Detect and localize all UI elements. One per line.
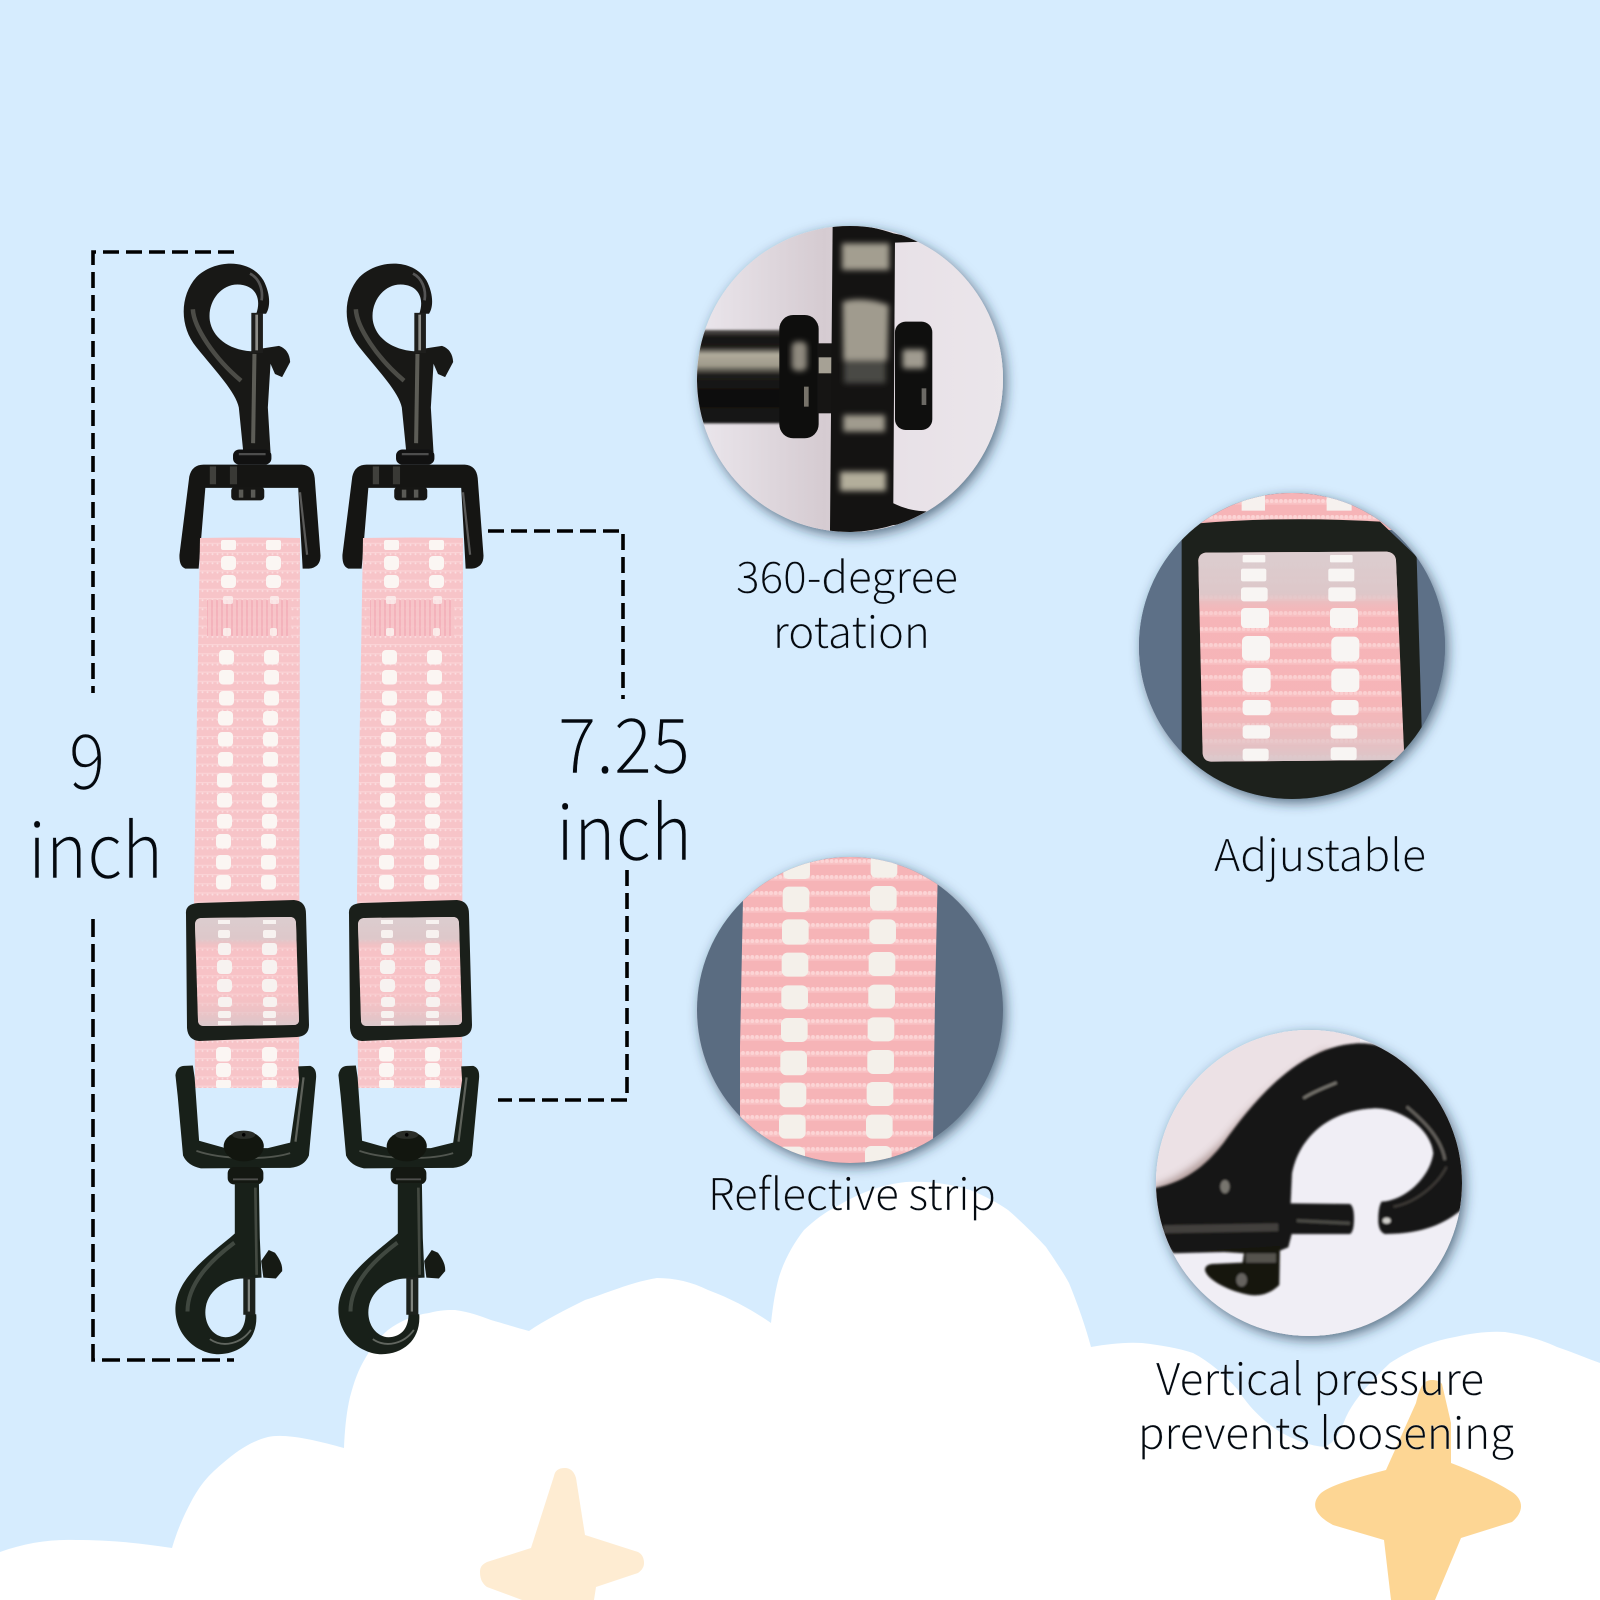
rivet nub — [895, 322, 932, 430]
caption: 360-degree rotation: 360-degree — [736, 542, 958, 606]
detail circle: adjustable buckle — [1130, 485, 1460, 815]
detail circle: swivel — [690, 220, 1010, 540]
hook highlights — [1303, 1083, 1337, 1098]
dimension line: 7.25 inch — [488, 531, 627, 1100]
hook body — [175, 1183, 262, 1354]
cloud — [0, 1182, 1600, 1600]
decorative star: small — [480, 1468, 644, 1600]
label: 7.25 inch: inch — [556, 772, 692, 882]
bar tack stitching — [207, 600, 291, 636]
label: 9 inch: inch — [28, 790, 163, 900]
vertical ring — [830, 225, 933, 532]
backdrop — [1153, 1027, 1360, 1190]
strap assembly: left — [175, 264, 321, 1354]
caption: Vertical pressure prevents loosening: Vertical pressure — [1156, 1344, 1484, 1408]
swivel shaft — [693, 330, 782, 423]
collar — [779, 315, 819, 438]
reflective dots — [778, 855, 897, 1170]
dimension line: 9 inch — [93, 252, 234, 1360]
caption: Adjustable: Adjustable — [1214, 820, 1426, 884]
strap assembly: right — [338, 264, 484, 1354]
bottom frame — [175, 1065, 316, 1168]
webbing close-up — [740, 850, 938, 1170]
hook body — [1153, 1043, 1477, 1253]
caption: Vertical pressure prevents loosening — [1138, 1344, 1514, 1462]
label: 9 inch: 9 — [69, 701, 105, 811]
swivel neck — [228, 1167, 263, 1184]
caption: Reflective strip: Reflective strip — [708, 1159, 996, 1223]
caption: Vertical pressure prevents loosening: prevents loosening — [1138, 1398, 1514, 1462]
label: 9 inch — [28, 701, 163, 900]
slide buckle — [186, 900, 309, 1041]
detail circle: reflective strip — [697, 850, 1003, 1170]
strap top — [1192, 493, 1392, 530]
bolt head — [224, 1131, 264, 1161]
caption: 360-degree rotation: rotation — [773, 597, 930, 661]
trigger — [1203, 1246, 1280, 1295]
reflective dots — [216, 540, 281, 1088]
detail circle: snap hook close-up — [1150, 1025, 1477, 1345]
bottom snap hook — [175, 1065, 316, 1354]
buckle frame — [1182, 519, 1422, 807]
caption: 360-degree rotation — [736, 542, 958, 661]
top snap hook — [179, 264, 321, 569]
top frame — [179, 465, 321, 569]
window — [1198, 552, 1404, 762]
webbing strap — [194, 538, 300, 1088]
ring highlights — [840, 243, 889, 491]
label: 7.25 inch — [556, 685, 692, 882]
label: 7.25 inch: 7.25 — [558, 685, 690, 795]
hook trigger — [261, 1250, 282, 1278]
decorative star: large — [1315, 1380, 1521, 1600]
top swivel — [233, 449, 271, 465]
